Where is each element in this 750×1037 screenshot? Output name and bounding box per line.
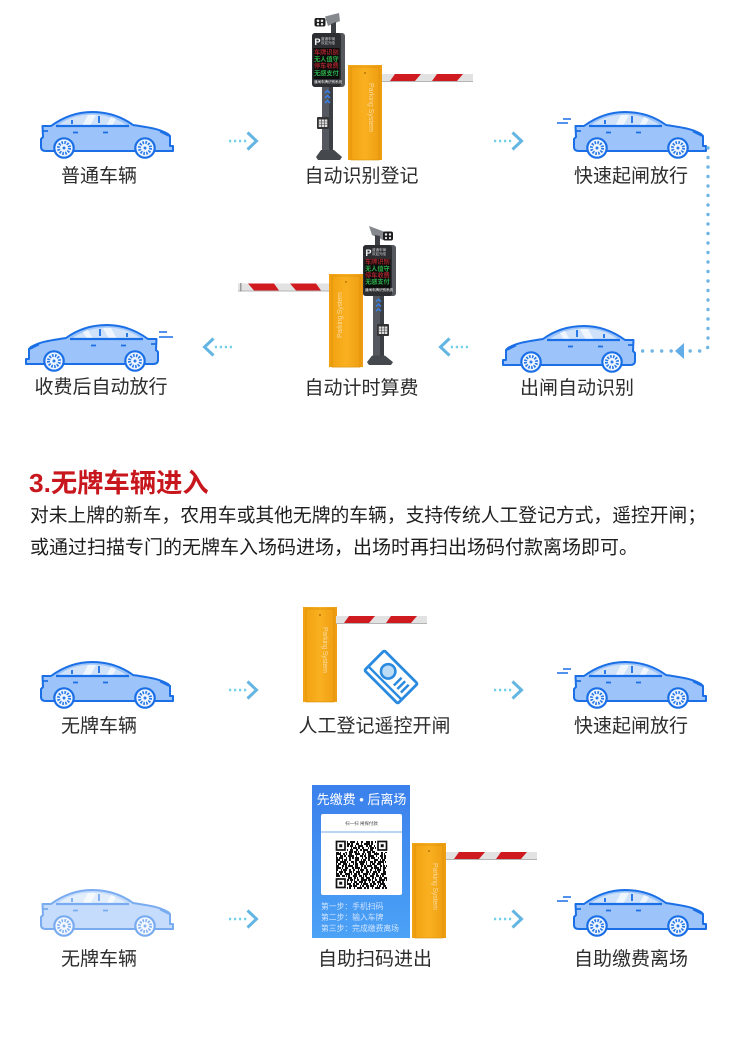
display text: 停车收费 bbox=[314, 62, 339, 70]
keypad bbox=[377, 324, 389, 336]
section description: 或通过扫描专门的无牌车入场码进场，出场时再扫出场码付款离场即可。 bbox=[30, 536, 638, 558]
cabinet text: Parking System bbox=[431, 863, 438, 910]
display text: 欢迎光临 bbox=[321, 40, 335, 45]
gate cabinet bbox=[348, 65, 382, 160]
display text: 车牌识别 bbox=[365, 258, 390, 266]
label: 无牌车辆: 无牌车辆 bbox=[61, 715, 137, 737]
arrow bbox=[229, 132, 256, 150]
boom arm bbox=[238, 284, 329, 292]
car: 无牌车辆 bbox=[41, 662, 173, 708]
steps: 第一步：手机扫码 bbox=[321, 901, 384, 911]
steps: 第二步：输入车牌 bbox=[321, 912, 384, 922]
display text: 道闸车牌识别系统 bbox=[314, 79, 342, 84]
label: 人工登记遥控开闸: 人工登记遥控开闸 bbox=[298, 715, 451, 737]
car: 快速起闸放行 bbox=[557, 112, 706, 158]
arrow bbox=[440, 338, 468, 356]
boom arm bbox=[382, 74, 473, 82]
label: 快速起闸放行: 快速起闸放行 bbox=[574, 715, 688, 737]
QR code bbox=[336, 842, 387, 888]
display text: P bbox=[366, 248, 372, 258]
label: 出闸自动识别: 出闸自动识别 bbox=[520, 377, 634, 399]
display text: 车牌识别 bbox=[314, 48, 339, 56]
label: 自助缴费离场: 自助缴费离场 bbox=[574, 948, 688, 970]
cabinet text: Parking System bbox=[321, 627, 328, 673]
label: 无牌车辆: 无牌车辆 bbox=[61, 948, 137, 970]
QR payment poster bbox=[312, 785, 410, 938]
card caption: 扫一扫 闸探付款 bbox=[345, 820, 378, 827]
arrow bbox=[494, 910, 522, 928]
display text: 普通车辆 bbox=[321, 36, 335, 41]
display text: 欢迎光临 bbox=[372, 251, 386, 256]
display text: 道闸车牌识别系统 bbox=[365, 287, 393, 292]
display text: 无人值守 bbox=[314, 56, 339, 64]
QR finder patterns bbox=[335, 840, 388, 889]
car: 快速起闸放行 bbox=[557, 662, 706, 708]
steps bbox=[321, 901, 399, 933]
gate cabinet bbox=[412, 843, 446, 938]
poster background bbox=[312, 785, 410, 938]
boom end cap bbox=[240, 283, 242, 292]
keypad bbox=[317, 117, 329, 129]
poster title: 先缴费 • 后离场 bbox=[317, 792, 406, 807]
steps: 第三步：完成缴费离场 bbox=[321, 923, 399, 933]
camera bbox=[369, 226, 393, 245]
display text: P bbox=[314, 37, 321, 47]
cabinet text: Parking System bbox=[337, 292, 344, 338]
display text bbox=[314, 36, 342, 84]
camera bbox=[314, 13, 340, 33]
display text: 无感支付 bbox=[365, 278, 390, 286]
section description bbox=[30, 504, 706, 558]
faded car: 无牌车辆 bbox=[41, 890, 173, 936]
display text: 无人值守 bbox=[365, 265, 390, 273]
display pole bbox=[363, 245, 396, 365]
card divider bbox=[321, 831, 402, 833]
display text: 普通车辆 bbox=[372, 247, 386, 252]
gate cabinet bbox=[329, 274, 363, 367]
arrow bbox=[494, 132, 522, 150]
self-service barrier bbox=[412, 843, 537, 938]
cabinet text: Parking System bbox=[367, 83, 374, 132]
car: 收费后自动放行 bbox=[26, 325, 173, 371]
section description: 对未上牌的新车，农用车或其他无牌的车辆，支持传统人工登记方式，遥控开闸； bbox=[30, 504, 706, 526]
arrow bbox=[229, 910, 256, 928]
car: 出闸自动识别 bbox=[503, 326, 635, 372]
display text: 无感支付 bbox=[314, 70, 339, 78]
QR card bbox=[321, 814, 402, 895]
arrow bbox=[229, 682, 256, 698]
display text bbox=[365, 247, 393, 292]
manual barrier bbox=[303, 607, 427, 702]
barrier with recognition camera, top bbox=[312, 13, 473, 160]
car: 自助缴费离场 bbox=[557, 890, 706, 936]
section title: 3.无牌车辆进入 bbox=[29, 468, 209, 498]
car: 普通车辆 bbox=[41, 112, 173, 158]
label: 普通车辆: 普通车辆 bbox=[61, 165, 137, 187]
icon: remote control ticket bbox=[364, 650, 418, 704]
boom arm bbox=[446, 852, 537, 860]
display text: 停车收费 bbox=[365, 272, 390, 280]
label: 自动计时算费: 自动计时算费 bbox=[304, 377, 419, 399]
dotted connector arrow bbox=[640, 148, 708, 359]
label: 自动识别登记: 自动识别登记 bbox=[304, 165, 419, 187]
arrow bbox=[494, 682, 522, 698]
label: 自助扫码进出: 自助扫码进出 bbox=[318, 948, 432, 970]
arrow bbox=[204, 338, 232, 356]
boom arm bbox=[336, 616, 427, 624]
gate cabinet bbox=[303, 607, 337, 702]
label: 快速起闸放行: 快速起闸放行 bbox=[574, 165, 688, 187]
label: 收费后自动放行: 收费后自动放行 bbox=[34, 376, 168, 398]
barrier with recognition camera, bottom bbox=[238, 226, 396, 367]
display pole bbox=[312, 33, 345, 160]
